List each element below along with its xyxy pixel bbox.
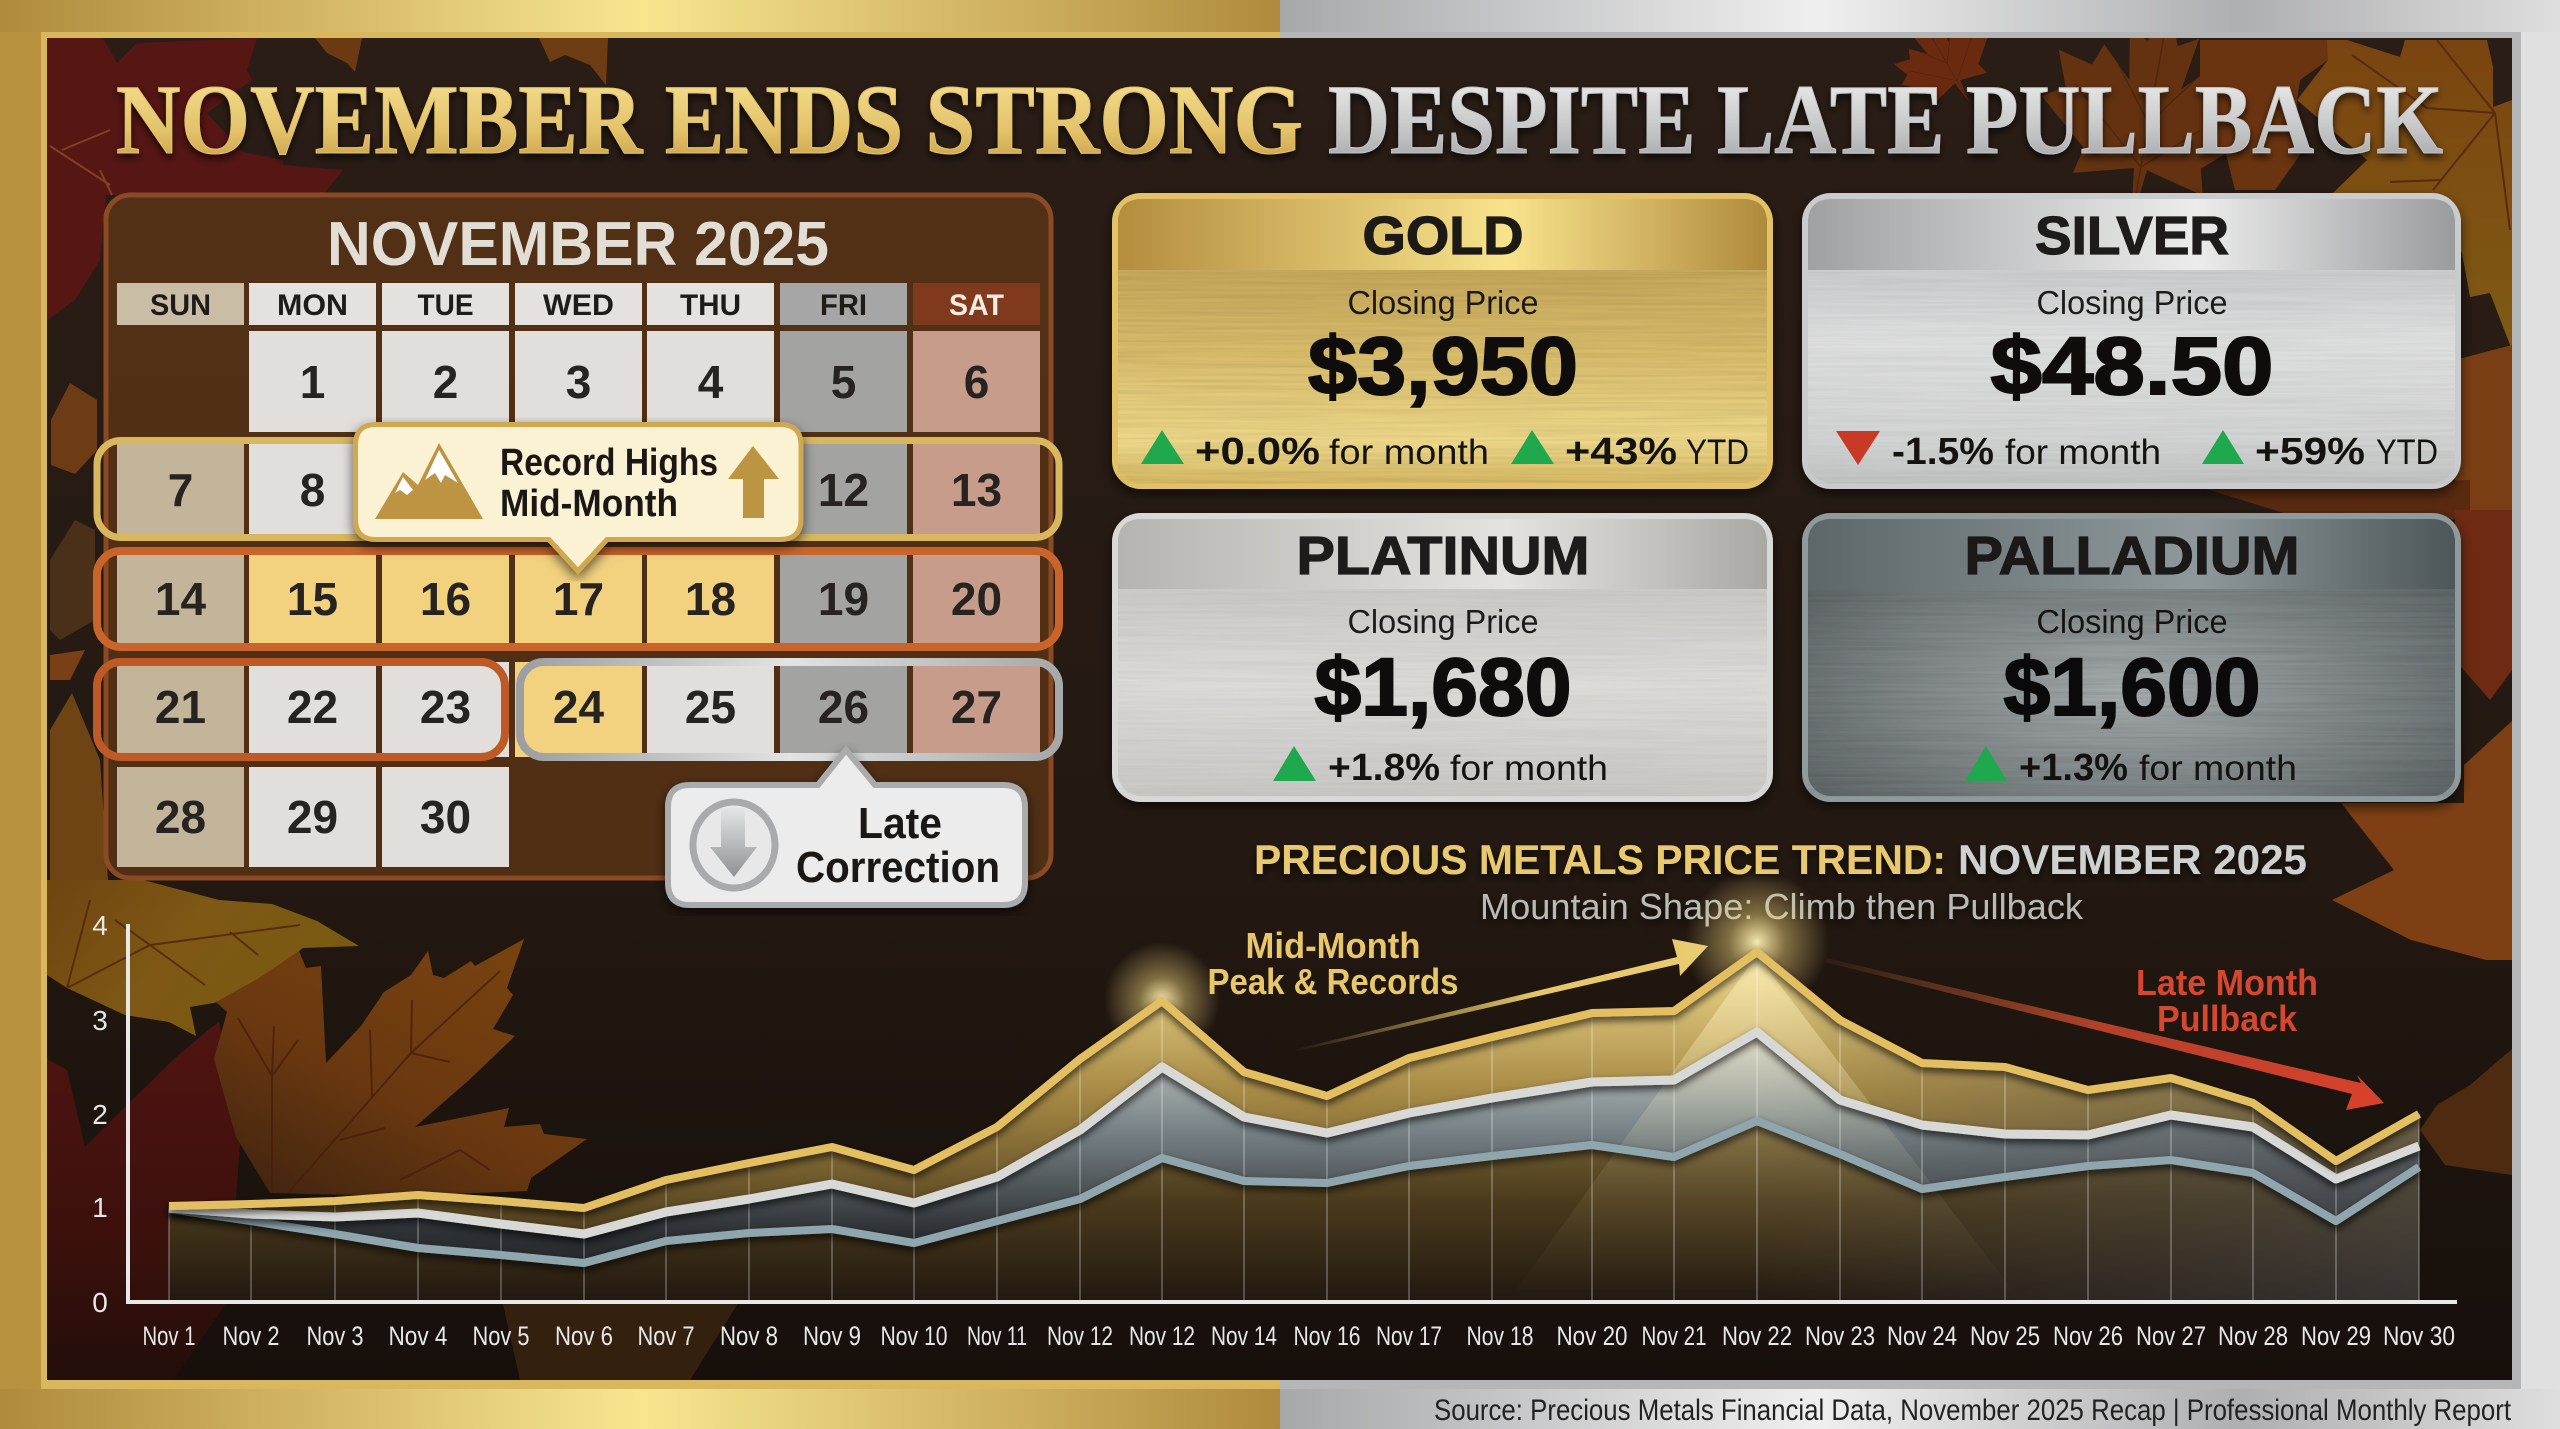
gold line xyxy=(169,952,2419,1208)
price: $1,680 xyxy=(1314,642,1572,733)
leaf: top-left dark red xyxy=(47,38,343,320)
monthly change: +1.8% xyxy=(1328,747,1440,789)
weekday header row: SAT xyxy=(949,289,1004,322)
date cells xyxy=(117,331,1040,867)
grey fade on right of chart xyxy=(1757,952,2419,1300)
platinum area xyxy=(169,1121,2419,1300)
leaf: top edge brown xyxy=(315,38,362,72)
date numbers: 29 xyxy=(287,791,338,843)
closing price label: Closing Price xyxy=(2036,603,2228,640)
leaf: left upper brown xyxy=(50,693,108,900)
callout text xyxy=(500,442,718,525)
closing price label: Closing Price xyxy=(2036,284,2228,321)
card: platinum xyxy=(1115,516,1770,799)
date numbers: 3 xyxy=(566,356,591,408)
calendar background xyxy=(106,195,1051,878)
weekday header row xyxy=(117,283,1040,325)
date numbers: 13 xyxy=(951,464,1002,516)
callout text xyxy=(796,799,1000,892)
platinum line xyxy=(169,1121,2419,1263)
annotation text: Mid-Month xyxy=(1246,925,1420,966)
closing price label: Closing Price xyxy=(1348,603,1538,640)
annotation text: Late Month xyxy=(2136,962,2318,1003)
x axis labels: Nov 25 xyxy=(1970,1321,2040,1351)
x axis labels: Nov 3 xyxy=(306,1321,364,1351)
annotation text xyxy=(2136,962,2318,1039)
monthly change: +1.3% xyxy=(2019,747,2128,789)
callout text: Correction xyxy=(796,843,1000,892)
y axis labels: 1 xyxy=(92,1192,108,1223)
x axis labels: Nov 8 xyxy=(720,1321,778,1351)
monthly and ytd change: +0.0% xyxy=(1195,431,1320,473)
date numbers: 22 xyxy=(287,681,338,733)
gold area xyxy=(169,952,2419,1300)
annotation: late month pullback xyxy=(1825,958,2384,1110)
date numbers: 21 xyxy=(155,681,206,733)
card name: SILVER xyxy=(2035,206,2229,266)
date numbers: 23 xyxy=(420,681,471,733)
silver area xyxy=(169,1032,2419,1300)
callout: late correction xyxy=(668,750,1025,905)
x axis labels: Nov 24 xyxy=(1887,1321,1957,1351)
date numbers: 18 xyxy=(685,573,736,625)
callout: record highs xyxy=(356,424,801,571)
leaf: large orange maple xyxy=(214,939,587,1196)
weekday header row: TUE xyxy=(418,289,474,322)
leaf: right lower xyxy=(2420,1049,2512,1175)
x axis labels: Nov 22 xyxy=(1722,1321,1792,1351)
card header xyxy=(1118,199,1767,270)
y axis labels: 4 xyxy=(92,910,108,941)
date numbers: 12 xyxy=(818,464,869,516)
date numbers: 24 xyxy=(553,681,604,733)
title gold part: NOVEMBER ENDS STRONG xyxy=(116,64,1303,175)
price: $48.50 xyxy=(1990,321,2274,412)
glow at main peak xyxy=(1685,870,1829,1014)
date numbers: 27 xyxy=(951,681,1002,733)
weekday header row: SUN xyxy=(150,289,211,322)
weekday header row: FRI xyxy=(820,289,867,322)
x axis labels: Nov 1 xyxy=(142,1321,196,1351)
leaf: top edge brown 2 xyxy=(539,38,608,85)
weekday header row: WED xyxy=(543,289,614,322)
leaf: left faded xyxy=(50,520,95,640)
arrow: pullback xyxy=(1825,958,2384,1110)
x axis labels: Nov 6 xyxy=(555,1321,613,1351)
monthly and ytd change: +59% xyxy=(2255,431,2365,473)
date numbers: 28 xyxy=(155,791,206,843)
chart heading xyxy=(1254,836,2307,927)
annotation text xyxy=(1208,925,1458,1002)
week highlight: orange partial row xyxy=(97,662,505,757)
heading silver part: NOVEMBER 2025 xyxy=(1958,836,2307,883)
weekday header row: THU xyxy=(680,289,741,322)
y axis labels xyxy=(92,910,108,1318)
x axis labels: Nov 26 xyxy=(2053,1321,2123,1351)
price: $3,950 xyxy=(1308,321,1578,412)
leaf: top right brown xyxy=(2042,38,2226,193)
date numbers: 25 xyxy=(685,681,736,733)
monthly and ytd change: YTD xyxy=(2376,433,2438,472)
closing price label: Closing Price xyxy=(1348,284,1538,321)
date numbers: 4 xyxy=(698,356,724,408)
monthly and ytd change: for month xyxy=(1329,433,1489,472)
glow at first peak xyxy=(1104,942,1220,1058)
icon: down arrow in circle xyxy=(693,802,775,888)
heading gold part: PRECIOUS METALS PRICE TREND: xyxy=(1254,836,1946,883)
monthly and ytd change: +43% xyxy=(1565,431,1677,473)
date numbers: 17 xyxy=(553,573,604,625)
date numbers xyxy=(155,356,1002,843)
leaf: top right gold xyxy=(2297,40,2512,350)
leaf: lower left dark red xyxy=(47,1022,241,1380)
date numbers: 7 xyxy=(168,464,193,516)
annotation: mid-month peak xyxy=(1208,925,1708,1052)
monthly and ytd change xyxy=(1836,430,2438,473)
card header xyxy=(1808,519,2455,589)
date numbers: 26 xyxy=(818,681,869,733)
x axis labels: Nov 20 xyxy=(1556,1321,1628,1351)
monthly and ytd change xyxy=(1141,430,1749,473)
silver line xyxy=(169,1032,2419,1234)
x axis labels: Nov 16 xyxy=(1294,1321,1360,1351)
monthly change xyxy=(1273,746,1608,789)
spotlight under main peak xyxy=(1509,955,2020,1300)
date numbers: 6 xyxy=(964,356,989,408)
callout text: Mid-Month xyxy=(500,483,678,525)
x axis labels: Nov 11 xyxy=(967,1321,1027,1351)
x axis labels: Nov 21 xyxy=(1642,1321,1706,1351)
leaf: left small orange xyxy=(51,383,97,474)
week highlight: gold row xyxy=(97,440,1059,538)
card name: PLATINUM xyxy=(1296,526,1590,586)
x axis labels: Nov 17 xyxy=(1376,1321,1442,1351)
card name: GOLD xyxy=(1362,206,1524,266)
leaf: yellow maple xyxy=(47,880,359,1036)
weekday header row: MON xyxy=(277,289,348,322)
x axis labels: Nov 2 xyxy=(222,1321,280,1351)
panel: calendar xyxy=(97,195,1059,878)
x axis labels: Nov 14 xyxy=(1211,1321,1277,1351)
annotation text: Pullback xyxy=(2157,998,2298,1039)
x axis labels: Nov 9 xyxy=(803,1321,861,1351)
x axis labels: Nov 29 xyxy=(2301,1321,2371,1351)
x axis labels: Nov 10 xyxy=(880,1321,948,1351)
axes xyxy=(128,924,2457,1302)
x axis labels: Nov 12 xyxy=(1129,1321,1195,1351)
title xyxy=(116,64,2443,175)
date numbers: 19 xyxy=(818,573,869,625)
icon: up arrow xyxy=(728,446,779,518)
y axis labels: 2 xyxy=(92,1099,108,1130)
y axis labels: 3 xyxy=(92,1005,108,1036)
x axis labels: Nov 23 xyxy=(1805,1321,1875,1351)
date numbers: 16 xyxy=(420,573,471,625)
x axis labels: Nov 4 xyxy=(388,1321,448,1351)
calendar heading: NOVEMBER 2025 xyxy=(327,210,829,279)
callout text: Late xyxy=(858,799,942,848)
icon: mountains xyxy=(375,443,483,519)
monthly change xyxy=(1965,746,2297,789)
week highlight: silver partial row xyxy=(520,662,1059,757)
x axis labels: Nov 12 xyxy=(1047,1321,1113,1351)
date numbers: 14 xyxy=(155,573,206,625)
date numbers: 30 xyxy=(420,791,471,843)
date numbers: 5 xyxy=(831,356,856,408)
x axis labels: Nov 28 xyxy=(2218,1321,2288,1351)
annotation text: Peak & Records xyxy=(1208,961,1458,1002)
leaf: top right red xyxy=(1894,38,1988,102)
card header xyxy=(1808,199,2455,270)
card: palladium xyxy=(1805,516,2458,799)
date numbers: 20 xyxy=(951,573,1002,625)
x axis labels: Nov 7 xyxy=(638,1321,694,1351)
monthly change: for month xyxy=(2139,749,2297,788)
leaf: bottom faint xyxy=(503,1304,738,1380)
card name: PALLADIUM xyxy=(1964,526,2300,586)
x axis labels xyxy=(142,1321,2455,1351)
week highlight: orange row xyxy=(97,551,1059,647)
card header xyxy=(1118,519,1767,589)
x axis labels: Nov 30 xyxy=(2383,1321,2455,1351)
x axis labels: Nov 5 xyxy=(472,1321,530,1351)
x axis labels: Nov 18 xyxy=(1466,1321,1534,1351)
price: $1,600 xyxy=(2004,642,2260,733)
leaf: left small rust xyxy=(50,650,85,680)
date numbers: 15 xyxy=(287,573,338,625)
monthly and ytd change: for month xyxy=(2005,433,2161,472)
chart subtitle: Mountain Shape: Climb then Pullback xyxy=(1480,886,2084,927)
monthly and ytd change: -1.5% xyxy=(1892,431,1994,473)
leaf: right orange xyxy=(2332,721,2512,960)
line chart xyxy=(92,870,2457,1351)
monthly change: for month xyxy=(1450,749,1608,788)
x axis labels: Nov 27 xyxy=(2136,1321,2206,1351)
callout text: Record Highs xyxy=(500,442,718,484)
leaf: right rust xyxy=(2455,345,2512,520)
leaf: right dark red xyxy=(2455,510,2512,700)
leaf: between cards xyxy=(2200,480,2470,520)
monthly and ytd change: YTD xyxy=(1686,433,1749,472)
date numbers: 2 xyxy=(433,356,458,408)
date numbers: 1 xyxy=(300,356,325,408)
vertical guides xyxy=(169,952,2419,1300)
card: gold xyxy=(1115,196,1770,486)
y axis labels: 0 xyxy=(92,1287,108,1318)
date numbers: 8 xyxy=(300,464,325,516)
card: silver xyxy=(1805,196,2458,486)
arrow: climb xyxy=(1292,939,1708,1052)
leaf: top right back xyxy=(2200,40,2328,190)
